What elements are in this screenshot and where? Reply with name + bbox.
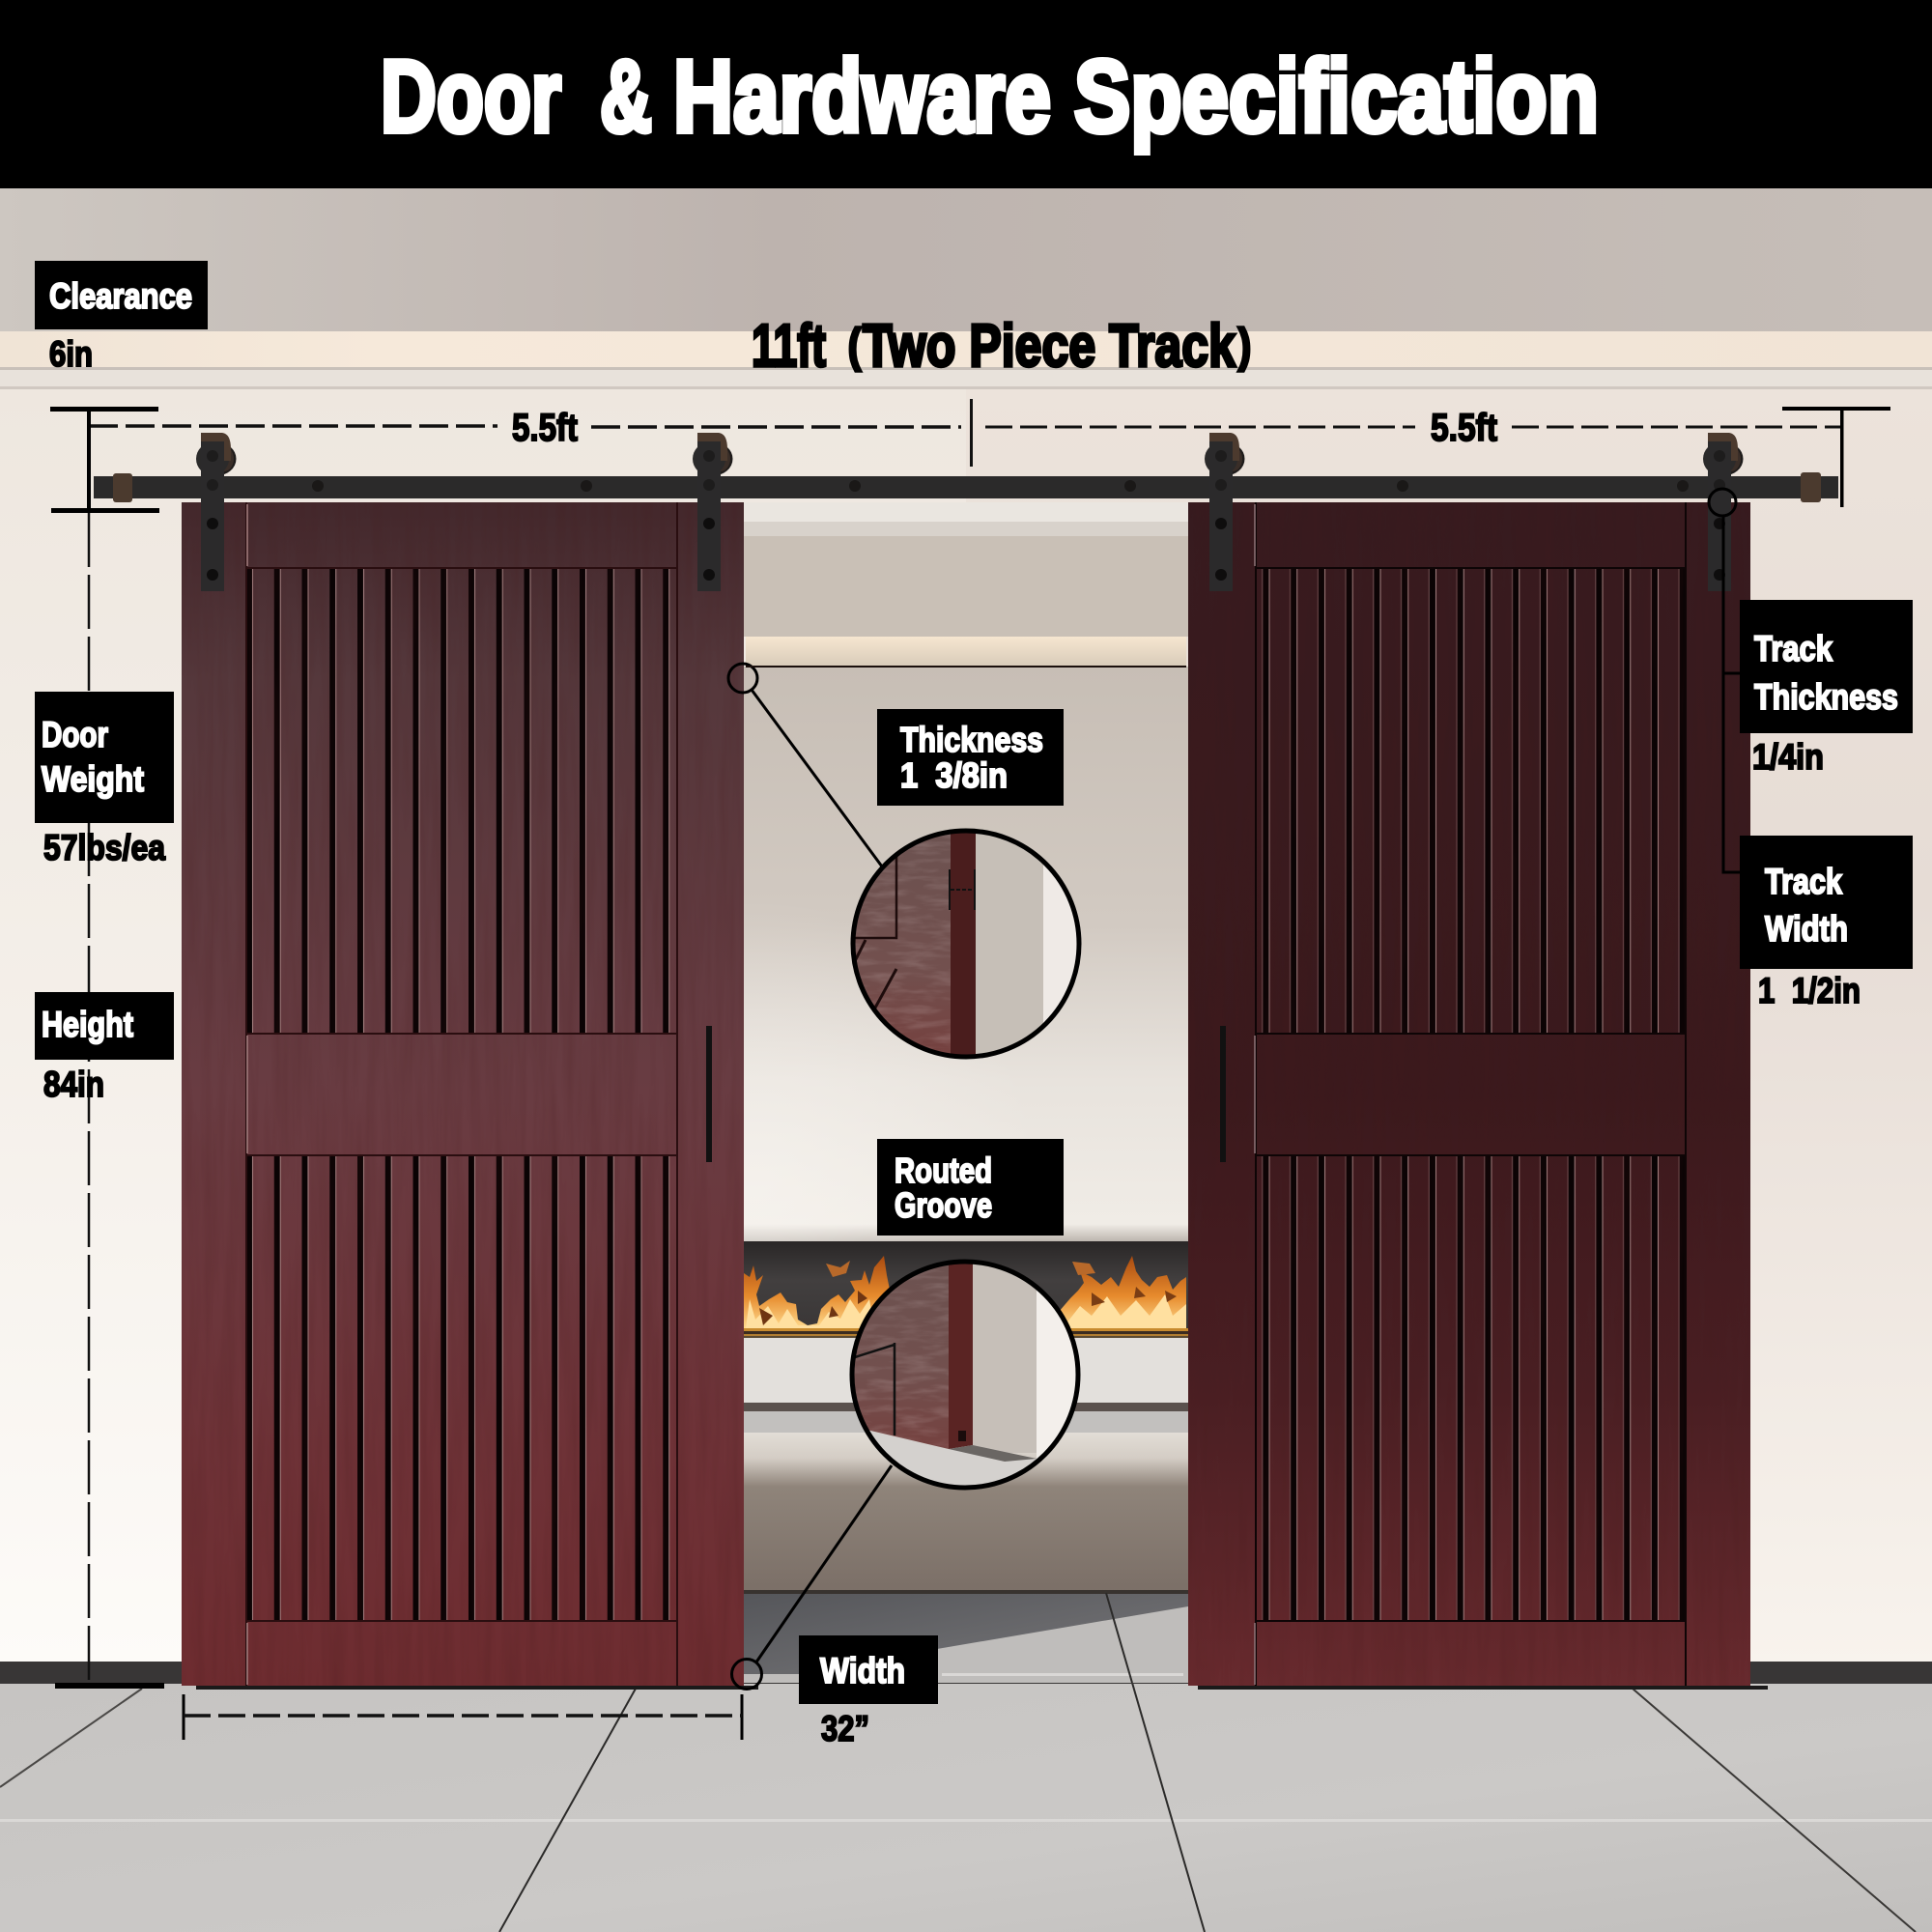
track thickness label: Thickness xyxy=(1754,677,1898,717)
right door xyxy=(1188,502,1768,1690)
width callout leader xyxy=(732,1465,892,1689)
clearance label: Clearance xyxy=(49,276,192,316)
width label xyxy=(799,1635,938,1748)
track width label xyxy=(1740,836,1913,1010)
detail circle: routed groove xyxy=(850,1260,1087,1492)
track length label: ( xyxy=(848,321,861,372)
left door handle xyxy=(706,1026,712,1162)
width label: Width xyxy=(820,1651,905,1690)
left door xyxy=(182,502,758,1690)
height label xyxy=(35,992,174,1104)
door weight label: 57lbs/ea xyxy=(43,828,165,867)
height dimension line xyxy=(55,513,164,1689)
right bracket xyxy=(1782,407,1890,507)
right door grooved upper panel xyxy=(1256,568,1686,1034)
floor xyxy=(0,1593,1932,1932)
title: Door xyxy=(381,40,561,154)
track width label: Track xyxy=(1765,862,1842,901)
left clearance bracket xyxy=(50,407,159,513)
detail circle: door thickness xyxy=(850,828,1087,1060)
height label: Height xyxy=(42,1005,133,1044)
thickness label xyxy=(877,709,1064,806)
track thickness label: Track xyxy=(1754,629,1833,668)
interior room view xyxy=(744,502,1188,1683)
thickness label: Thickness xyxy=(900,720,1043,759)
height label: 84in xyxy=(43,1065,104,1104)
title: Hardware xyxy=(673,40,1051,154)
width dimension xyxy=(182,1694,744,1740)
thickness callout leader xyxy=(728,664,1186,867)
background wall xyxy=(0,188,1932,1664)
clearance label xyxy=(35,261,208,374)
routed groove label xyxy=(877,1139,1064,1236)
title: & xyxy=(600,40,652,154)
right track dimension: 5.5ft xyxy=(1431,407,1497,449)
hanger 2 xyxy=(693,433,732,591)
right door grooved lower panel xyxy=(1256,1155,1686,1621)
track callout leader xyxy=(1709,489,1740,872)
track length label: 11ft xyxy=(752,313,826,380)
routed groove label: Routed xyxy=(895,1151,992,1190)
routed groove label: Groove xyxy=(895,1185,992,1225)
title: Specification xyxy=(1074,40,1599,154)
clearance label: 6in xyxy=(49,334,93,374)
right door handle xyxy=(1220,1026,1226,1162)
track length label xyxy=(752,313,1251,380)
track width label: Width xyxy=(1765,909,1848,949)
track thickness label xyxy=(1740,600,1913,777)
door weight label: Weight xyxy=(42,759,144,799)
left door grooved upper panel xyxy=(246,568,677,1034)
barn door track xyxy=(94,472,1838,502)
hanger 1 xyxy=(196,433,236,591)
door weight label: Door xyxy=(42,715,108,754)
centre tick xyxy=(970,399,973,467)
width label: 32” xyxy=(821,1709,869,1748)
door weight label xyxy=(35,692,174,867)
skirting board xyxy=(0,1662,1932,1684)
flames right xyxy=(1055,1256,1186,1328)
track length label: ) xyxy=(1238,321,1251,372)
title bar xyxy=(0,0,1932,188)
title xyxy=(381,40,1599,154)
track thickness label: 1/4in xyxy=(1752,737,1824,777)
track width label: 1 1/2in xyxy=(1758,971,1861,1010)
left track dimension: 5.5ft xyxy=(512,407,578,449)
hanger 3 xyxy=(1205,433,1244,591)
hanger 4 xyxy=(1703,433,1743,591)
flames left xyxy=(744,1256,891,1328)
track length label: Two Piece Track xyxy=(863,313,1236,380)
thickness label: 1 3/8in xyxy=(900,755,1008,795)
left door grooved lower panel xyxy=(246,1155,677,1621)
